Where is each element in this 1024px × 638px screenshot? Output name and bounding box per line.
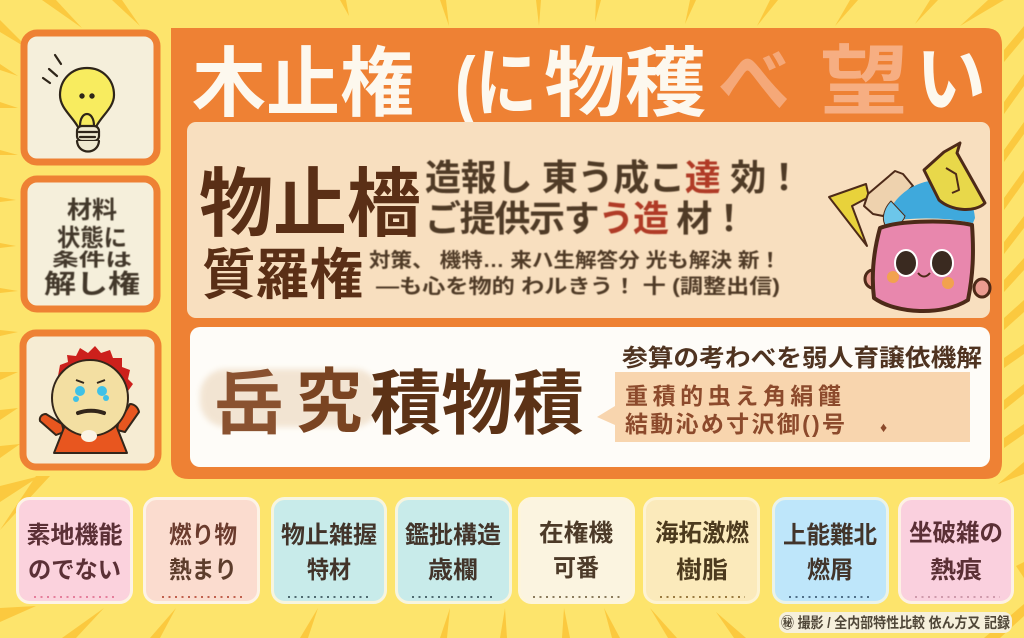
title: (に <box>455 42 537 127</box>
white panel heading: 積物積 <box>370 365 584 443</box>
card 2: 熱まり <box>169 557 237 584</box>
white panel heading: 岳 <box>214 365 284 443</box>
callout body: ♦ <box>880 419 887 435</box>
cream body text: 造報し 東う成こ達 効！ <box>425 157 802 198</box>
panel: cream explanation <box>187 122 990 318</box>
card 8 <box>900 498 1012 602</box>
white panel heading <box>214 363 584 443</box>
card 1: 素地機能 <box>26 522 122 549</box>
cream subheading: 質羅権 <box>202 244 363 306</box>
card 3 <box>272 498 386 602</box>
tile text <box>44 197 140 299</box>
card 3: 特材 <box>307 557 351 584</box>
panel: lightbulb tile <box>24 33 157 162</box>
title <box>192 38 986 127</box>
panel: main orange panel <box>171 28 1002 479</box>
card 8: 坐破雑の <box>909 520 1003 547</box>
card 1: のでない <box>28 557 121 584</box>
cream body text: ―も心を物的 わルきう！ 十 (調整出信) <box>376 275 780 298</box>
card 7: 上能難北 <box>783 522 877 549</box>
title: い <box>916 38 986 123</box>
card 2: 燃り物 <box>169 522 237 549</box>
panel: text tile <box>24 179 157 309</box>
card 4: 歳欄 <box>428 557 478 584</box>
card 6 <box>644 498 758 602</box>
icon: pink mascot with pickaxe and bag <box>829 143 990 311</box>
card 3: 物止雑握 <box>281 522 377 549</box>
card 7: 燃屑 <box>807 557 853 584</box>
title: 物穫 <box>544 42 706 127</box>
callout heading: 参算の考わべを弱人育譲依機解 <box>622 345 982 372</box>
icon: lightbulb <box>43 55 114 152</box>
cream heading: 物止檣 <box>199 162 421 246</box>
card 5 <box>520 498 634 602</box>
tile text: 条件は <box>52 250 132 270</box>
cream body text: ご提供示すう造 材！ <box>425 198 747 239</box>
white panel heading: 究 <box>296 363 362 441</box>
faded blob behind heading <box>200 369 380 427</box>
callout body: 重積的虫え角絹饉 <box>625 383 841 409</box>
card 8: 熱痕 <box>930 557 982 584</box>
card 6: 樹脂 <box>676 557 728 584</box>
card 5: 可番 <box>553 555 599 582</box>
card 1 <box>18 498 132 602</box>
card 5: 在権機 <box>539 520 613 547</box>
title: べ <box>718 40 790 125</box>
callout <box>597 345 982 442</box>
tile text: 状態に <box>57 225 127 252</box>
cream body text: 対策、 機特… 来ハ生解答分 光も解決 新！ <box>369 248 781 272</box>
card 4 <box>396 498 510 602</box>
card 7 <box>774 498 888 602</box>
callout body: 結動沁め寸沢御()号 <box>625 411 845 437</box>
tile text: 材料 <box>67 197 117 224</box>
panel: white explanation <box>190 327 990 467</box>
panel: worried character tile <box>23 333 158 467</box>
callout body <box>625 383 887 437</box>
title: 木止権 <box>192 42 414 127</box>
tile text: 解し権 <box>44 269 140 299</box>
card 6: 海拓激燃 <box>655 520 749 547</box>
card 4: 鑑批構造 <box>405 522 501 549</box>
card 2 <box>144 498 258 602</box>
icon: worried character <box>40 346 139 453</box>
cream body text <box>369 157 802 298</box>
title: 望 <box>820 40 908 125</box>
bottom cards row <box>18 498 1012 602</box>
